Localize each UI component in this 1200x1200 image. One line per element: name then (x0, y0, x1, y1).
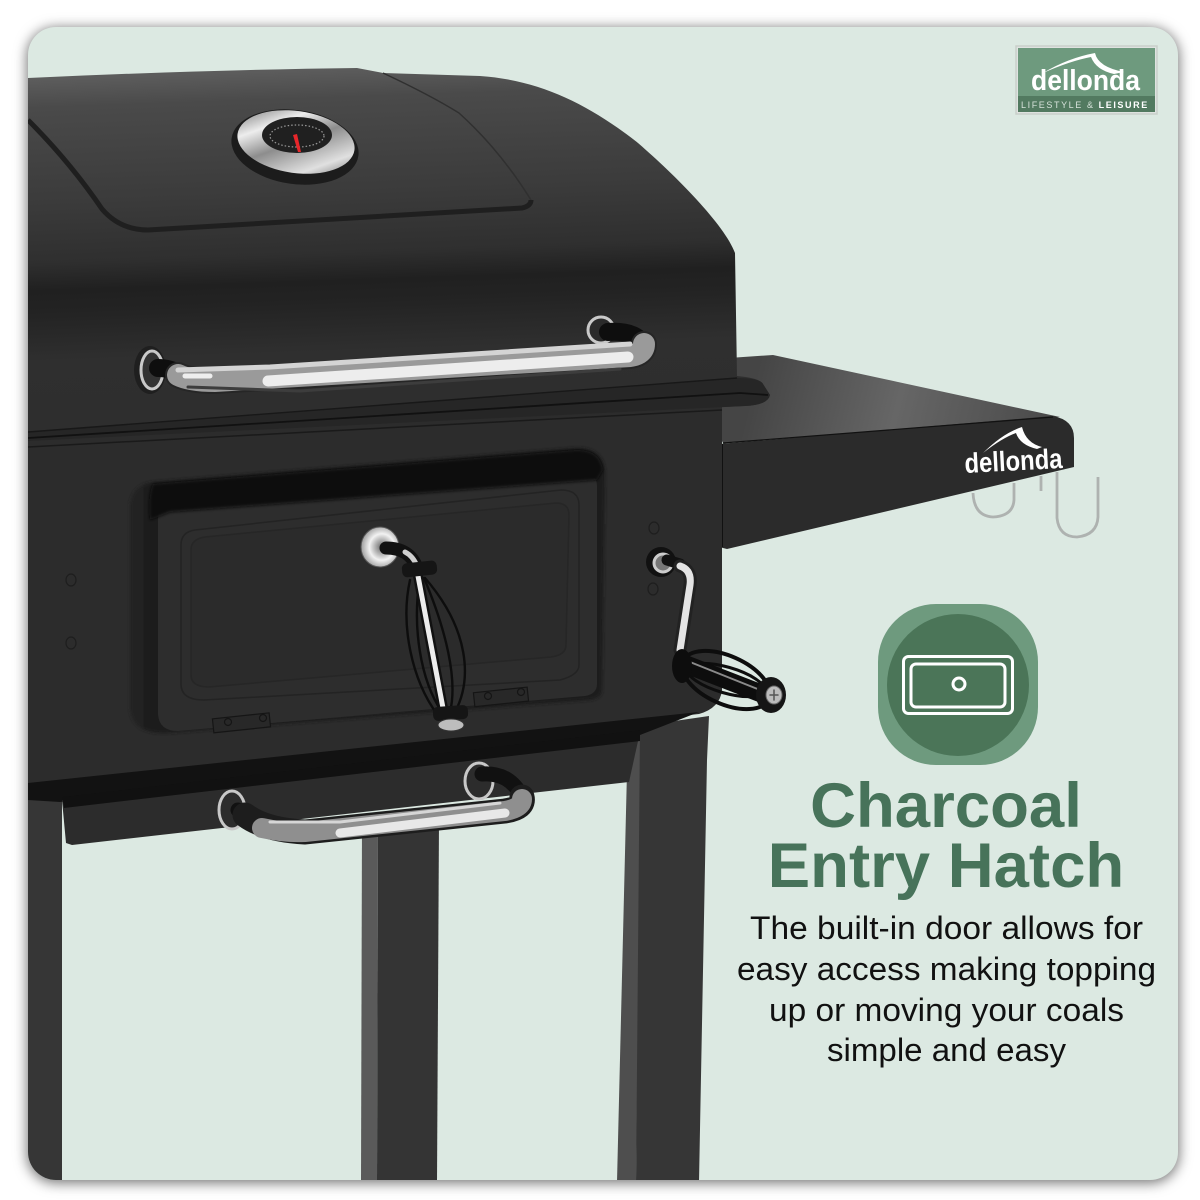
heading: Charcoal (810, 771, 1082, 841)
shelf logo: dellonda (964, 443, 1064, 479)
description text (737, 910, 1156, 1068)
thermometer gauge (232, 109, 358, 185)
side shelf (700, 355, 1098, 549)
underside shadow (28, 712, 699, 802)
shelf logo (966, 427, 1063, 473)
heading (768, 771, 1124, 901)
grill legs (28, 716, 709, 1182)
rivets (66, 522, 659, 649)
heading: Entry Hatch (768, 831, 1124, 901)
brand logo badge (1016, 46, 1157, 114)
front bracket (62, 732, 640, 845)
description text: The built-in door allows for (750, 910, 1143, 946)
hatch handle (361, 527, 468, 731)
lid handle (134, 317, 644, 394)
icon: hatch door (878, 604, 1038, 765)
charcoal hatch (130, 448, 786, 733)
hatch hinges (212, 687, 529, 733)
side crank handle (646, 547, 786, 721)
lower front handle (219, 763, 522, 833)
brand logo badge: dellonda (1031, 65, 1141, 97)
description text: easy access making topping (737, 951, 1156, 987)
lid raised panel (28, 73, 531, 230)
description text: up or moving your coals (769, 992, 1124, 1028)
brand logo badge: LIFESTYLE & LEISURE (1021, 100, 1149, 110)
shelf hooks (973, 472, 1098, 537)
description text: simple and easy (827, 1032, 1066, 1068)
grill body (28, 400, 722, 845)
grill lid (28, 68, 770, 447)
